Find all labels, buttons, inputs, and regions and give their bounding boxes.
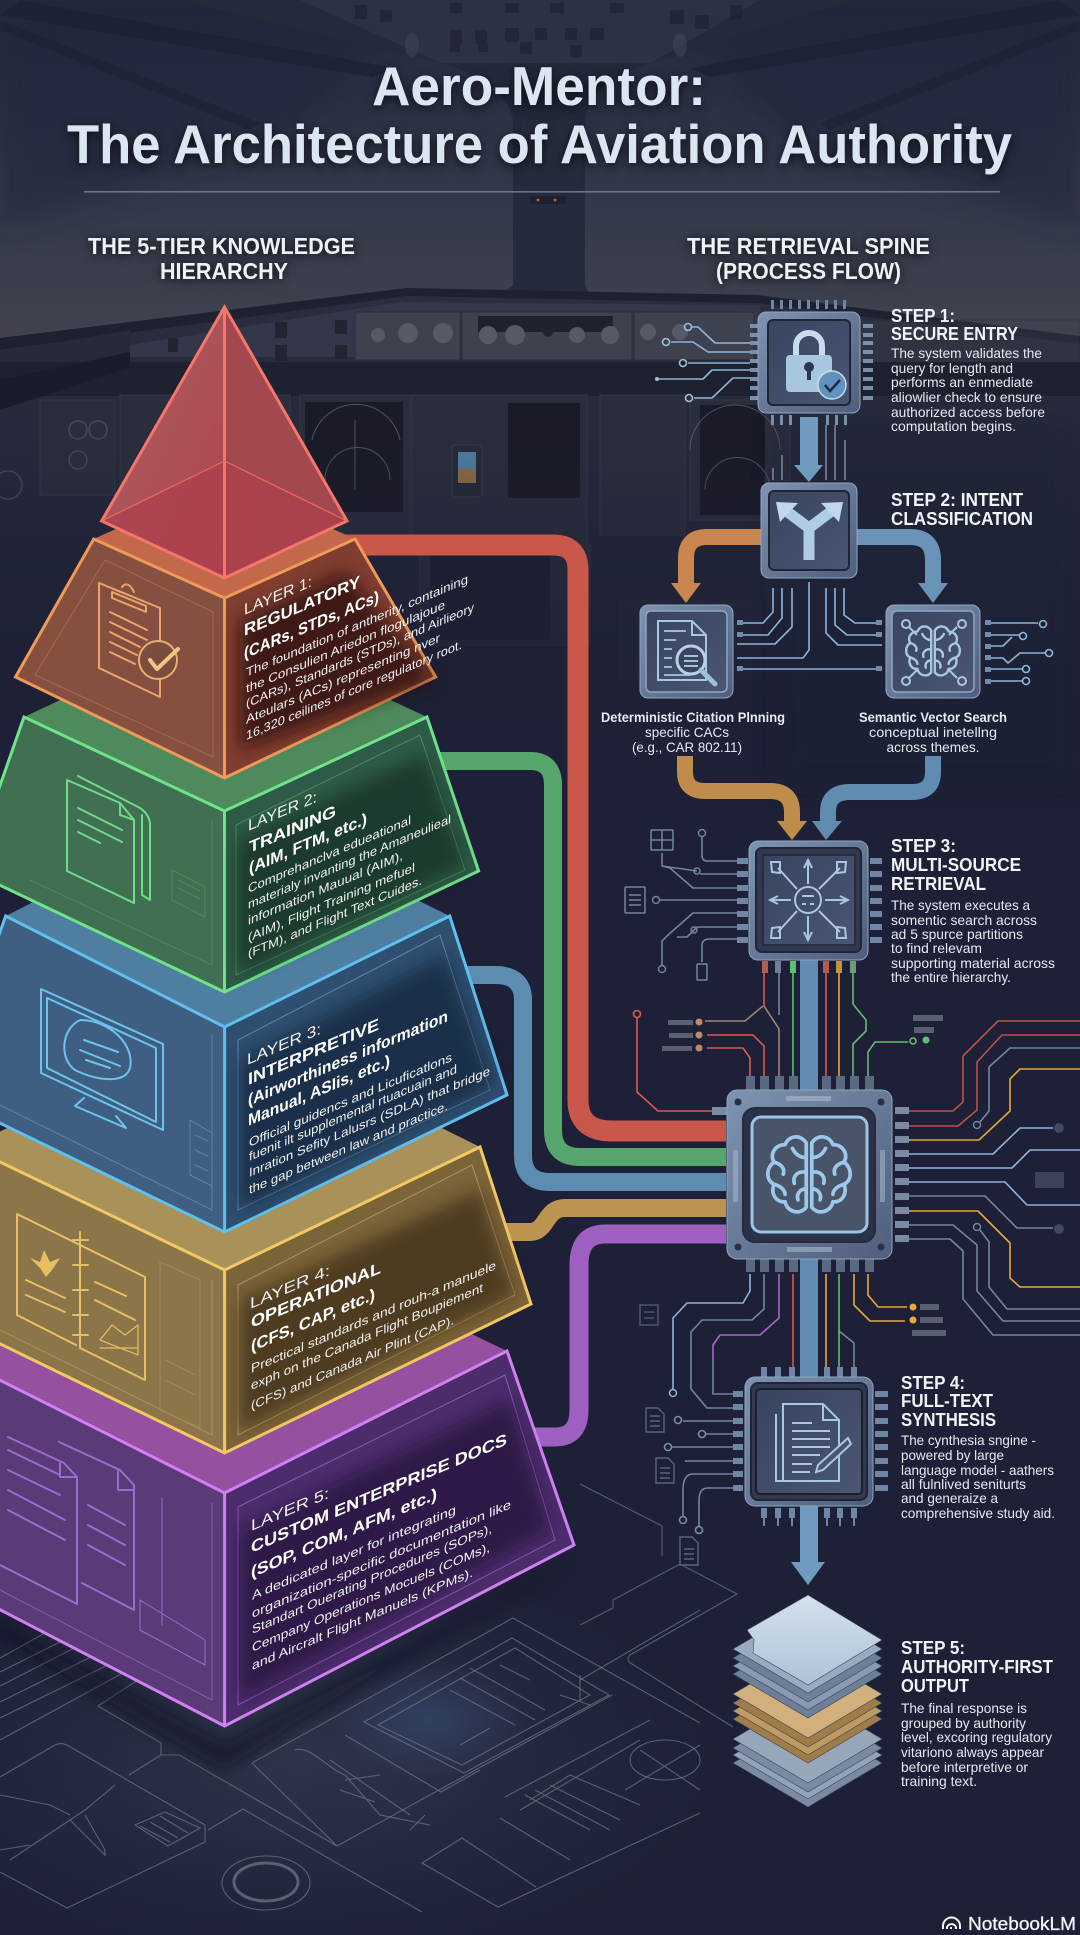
text: layer 4: (CFS, CAP, etc.) bbox=[251, 1284, 375, 1356]
arrowhead: citation planning bbox=[671, 583, 701, 603]
icon: operations chart bbox=[17, 1214, 200, 1428]
icon: forked arrows bbox=[776, 502, 843, 560]
circuit traces: around step 3 bbox=[625, 830, 1080, 1408]
connector: blue layer 3 band bbox=[462, 975, 726, 1182]
panel: red pyramid apex bbox=[102, 307, 347, 578]
text: step 2: CLASSIFICATION bbox=[891, 508, 1033, 529]
text: layer 5: LAYER 5: bbox=[251, 1484, 329, 1535]
icon: folder with documents bbox=[67, 776, 205, 917]
text: layer 3: Inration Sefity Lalusrs (SDLA) that bridge bbox=[249, 1063, 490, 1180]
arrowhead: semantic search bbox=[918, 583, 948, 603]
arrow: branch to citation planning bbox=[686, 537, 762, 584]
text: step 5 bbox=[901, 1637, 1054, 1789]
heading: 5-tier knowledge hierarchy: THE 5-TIER KNOWLEDGE bbox=[88, 233, 355, 259]
panel: layer 4 operational bbox=[0, 1020, 531, 1453]
text: step 4: FULL-TEXT bbox=[901, 1390, 994, 1411]
panel: layer 1 regulatory bbox=[16, 480, 474, 778]
text: layer 4 bbox=[250, 1257, 496, 1413]
title: Aero-Mentor: bbox=[372, 55, 706, 117]
chip: step 2 intent classification bbox=[761, 483, 857, 578]
text: layer 1: the Consulien Ariedon flogulajoue bbox=[246, 597, 445, 696]
text: step 4: comprehensive study aid. bbox=[901, 1505, 1055, 1521]
text: layer 3: the gap between law and practice. bbox=[249, 1098, 448, 1197]
text: step 3: somentic search across bbox=[891, 912, 1037, 928]
text: layer 1: (CARs), Standards (STDs), and Airlieory bbox=[246, 600, 474, 711]
caption: semantic vector search: conceptual inetellng bbox=[869, 724, 997, 740]
text: step 3: to find relevam bbox=[891, 940, 982, 956]
text: layer 1: LAYER 1: bbox=[244, 573, 312, 619]
text: layer 3: Manual, ASIis, etc.) bbox=[248, 1050, 390, 1130]
text: step 2: STEP 2: INTENT bbox=[891, 489, 1024, 510]
connector: gold layer 4 band bbox=[505, 1208, 726, 1232]
text: step 3: RETRIEVAL bbox=[891, 873, 986, 894]
heading: 5-tier knowledge hierarchy: HIERARCHY bbox=[160, 258, 288, 284]
caption: semantic vector search: across themes. bbox=[886, 739, 980, 755]
text: layer 3: INTERPRETIVE bbox=[248, 1014, 379, 1089]
text: step 5: grouped by authority bbox=[901, 1715, 1026, 1731]
text: layer 2: information Mauual (AIM), bbox=[248, 848, 403, 928]
heading: retrieval spine: (PROCESS FLOW) bbox=[716, 258, 901, 284]
text: step 5: before interpretive or bbox=[901, 1759, 1028, 1775]
icon: brain bbox=[768, 1137, 850, 1212]
caption: deterministic citation planning: Deterministic Citation Plnning bbox=[601, 709, 785, 725]
connector: red layer 1 band bbox=[345, 545, 726, 1131]
text: layer 2: (FTM), and Flight Text Cuides. bbox=[248, 873, 422, 961]
arrow: semantic to multi-source bbox=[828, 756, 933, 824]
text: step 1 bbox=[891, 305, 1045, 434]
chip: step 3 multi-source retrieval bbox=[737, 841, 882, 973]
title bbox=[67, 55, 1012, 175]
icon: document pages bbox=[0, 1437, 205, 1665]
text: step 3 bbox=[891, 835, 1055, 985]
text: step 5: training text. bbox=[901, 1773, 977, 1789]
chip: central retrieval core bbox=[712, 1076, 909, 1272]
icon: padlock with check bbox=[786, 333, 846, 399]
caption: semantic vector search: Semantic Vector Search bbox=[859, 709, 1007, 725]
circuit traces: around step 4 bbox=[646, 1408, 733, 1565]
icon: document with magnifier bbox=[658, 621, 715, 684]
text: layer 1: 16,320 ceilines of core regulatory root. bbox=[246, 637, 462, 743]
circuit traces: around step 1 and step 2 bbox=[655, 324, 1052, 684]
panel: layer 2 training bbox=[0, 623, 479, 992]
text: layer 2: TRAINING bbox=[249, 801, 336, 857]
text: layer 1 bbox=[244, 571, 474, 743]
text: layer 5: organization-specific documentation like bbox=[252, 1497, 511, 1621]
icon: brain with nodes bbox=[902, 620, 966, 685]
arrowhead: semantic to multi-source bbox=[812, 821, 842, 840]
text: layer 4: exph on the Canada Flight Boupiement bbox=[251, 1280, 483, 1393]
heading: retrieval spine: THE RETRIEVAL SPINE bbox=[687, 233, 930, 259]
arrow: step 4 to output bbox=[791, 1506, 825, 1585]
text: layer 3 bbox=[247, 1006, 490, 1197]
text: layer 5: Standart Ouerating Procedures (SOPs), bbox=[252, 1521, 492, 1637]
text: step 5: STEP 5: bbox=[901, 1637, 965, 1658]
text: layer 3: fuenit ilt supplemental rtuacuain and bbox=[249, 1061, 457, 1164]
text: step 4: and generaize a bbox=[901, 1490, 998, 1506]
text: layer 1: Ateulars (ACs) representing nver bbox=[246, 630, 441, 727]
arrow: step 1 to step 2 bbox=[794, 417, 823, 482]
panel: layer 3 interpretive bbox=[0, 805, 507, 1232]
text: layer 2: (AIM, FTM, etc.) bbox=[249, 809, 367, 878]
text: step 4: powered by large bbox=[901, 1447, 1004, 1463]
text: step 2 bbox=[891, 489, 1033, 529]
text: step 4: all fulnlived seniturts bbox=[901, 1476, 1026, 1492]
text: layer 5: A dedicated layer for integrating bbox=[252, 1502, 456, 1603]
text: layer 4: Prectical standards and rouh-a manuele bbox=[251, 1258, 496, 1376]
spine: core to step 4 bbox=[800, 1258, 818, 1380]
text: step 5: The final response is bbox=[901, 1700, 1027, 1716]
text: layer 5: CUSTOM ENTERPRISE DOCS bbox=[251, 1429, 507, 1557]
text: layer 5: and Aircralt Flight Manuels (KPMs). bbox=[252, 1565, 473, 1673]
text: layer 1: The foundation of antherity, containing bbox=[246, 571, 468, 680]
text: step 4: The cynthesia sngine - bbox=[901, 1432, 1036, 1448]
text: step 1: computation begins. bbox=[891, 418, 1016, 434]
text: step 3: ad 5 spurce partitions bbox=[891, 926, 1023, 942]
connector: green layer 2 band bbox=[436, 761, 726, 1157]
heading: retrieval spine bbox=[687, 233, 930, 284]
text: layer 4: (CFS) and Canada Air Plint (CAP). bbox=[251, 1312, 454, 1413]
caption: deterministic citation planning: specific CACs bbox=[645, 724, 729, 740]
arrow: branch to semantic search bbox=[857, 537, 933, 584]
text: layer 3: Official guidencs and Licuficatlons bbox=[249, 1049, 452, 1150]
text: layer 4: OPERATIONAL bbox=[251, 1257, 381, 1332]
text: step 5: level, excoring regulatory bbox=[901, 1729, 1052, 1745]
text: step 4: STEP 4: bbox=[901, 1372, 965, 1393]
arrowhead: citation to multi-source bbox=[777, 821, 807, 840]
chip: semantic vector search bbox=[886, 605, 980, 698]
text: step 5: OUTPUT bbox=[901, 1675, 970, 1696]
text: layer 1: (CARs, STDs, ACs) bbox=[244, 586, 379, 663]
text: layer 3: LAYER 3: bbox=[247, 1020, 321, 1069]
arrow: citation to multi-source bbox=[685, 756, 792, 824]
text: step 5: AUTHORITY-FIRST bbox=[901, 1656, 1054, 1677]
text: step 4 bbox=[901, 1372, 1055, 1521]
text: step 3: the entire hierarchy. bbox=[891, 969, 1011, 985]
text: layer 5 bbox=[251, 1429, 511, 1673]
text: layer 2: (AIM), Flight Training mefuel bbox=[248, 860, 415, 945]
text: step 4: language model - aathers bbox=[901, 1462, 1054, 1478]
text: layer 4: LAYER 4: bbox=[250, 1262, 330, 1313]
spine: step 3 to core bbox=[800, 960, 818, 1092]
text: step 4: SYNTHESIS bbox=[901, 1409, 996, 1430]
text: step 3: MULTI-SOURCE bbox=[891, 854, 1021, 875]
text: step 1: query for length and bbox=[891, 360, 1013, 376]
text: step 1: SECURE ENTRY bbox=[891, 323, 1019, 344]
caption: deterministic citation planning: (e.g., CAR 802.11) bbox=[632, 739, 742, 755]
icon: radial retrieval arrows bbox=[770, 860, 848, 940]
text: layer 5: (SOP, COM, AFM, etc.) bbox=[251, 1484, 437, 1582]
text: layer 2 bbox=[248, 788, 451, 961]
text: layer 3: (Airworthiness information bbox=[248, 1006, 448, 1110]
chip: deterministic citation planning bbox=[640, 605, 733, 698]
text: layer 2: materialy invanting the Amaneulieal bbox=[248, 811, 451, 912]
text: step 1: aliowlier check to ensure bbox=[891, 389, 1042, 405]
text: step 3: The system executes a bbox=[891, 897, 1030, 913]
logo: NotebookLM: NotebookLM bbox=[968, 1914, 1076, 1934]
text: step 3: supporting material across bbox=[891, 955, 1055, 971]
text: step 1: The system validates the bbox=[891, 345, 1042, 361]
connector: purple layer 5 band bbox=[530, 1234, 726, 1437]
chip: step 4 full-text synthesis bbox=[733, 1367, 888, 1526]
text: layer 1: REGULATORY bbox=[244, 571, 360, 640]
icon: layered output stack bbox=[733, 1595, 882, 1807]
icon: document with pencil bbox=[776, 1404, 851, 1481]
title: The Architecture of Aviation Authority bbox=[67, 113, 1012, 175]
text: step 1: STEP 1: bbox=[891, 305, 955, 326]
text: step 1: performs an enmediate bbox=[891, 374, 1033, 390]
heading: 5-tier knowledge hierarchy bbox=[88, 233, 355, 284]
text: step 3: STEP 3: bbox=[891, 835, 956, 856]
panel: layer 5 custom enterprise docs bbox=[0, 1215, 574, 1770]
text: step 5: vitariono always appear bbox=[901, 1744, 1044, 1760]
caption: deterministic citation planning bbox=[601, 709, 785, 755]
blueprint drawings on floor bbox=[0, 1484, 737, 1935]
text: layer 2: Comprehanclva edueational bbox=[248, 812, 411, 896]
caption: semantic vector search bbox=[859, 709, 1007, 755]
chip: step 1 secure entry bbox=[750, 300, 873, 425]
icon: monitor with speech bubble bbox=[41, 989, 212, 1186]
text: layer 2: LAYER 2: bbox=[248, 788, 317, 835]
text: layer 5: Cempany Operations Mocuels (COMs), bbox=[252, 1539, 490, 1655]
text: step 1: authorized access before bbox=[891, 404, 1045, 420]
icon: clipboard with check bbox=[99, 583, 178, 697]
